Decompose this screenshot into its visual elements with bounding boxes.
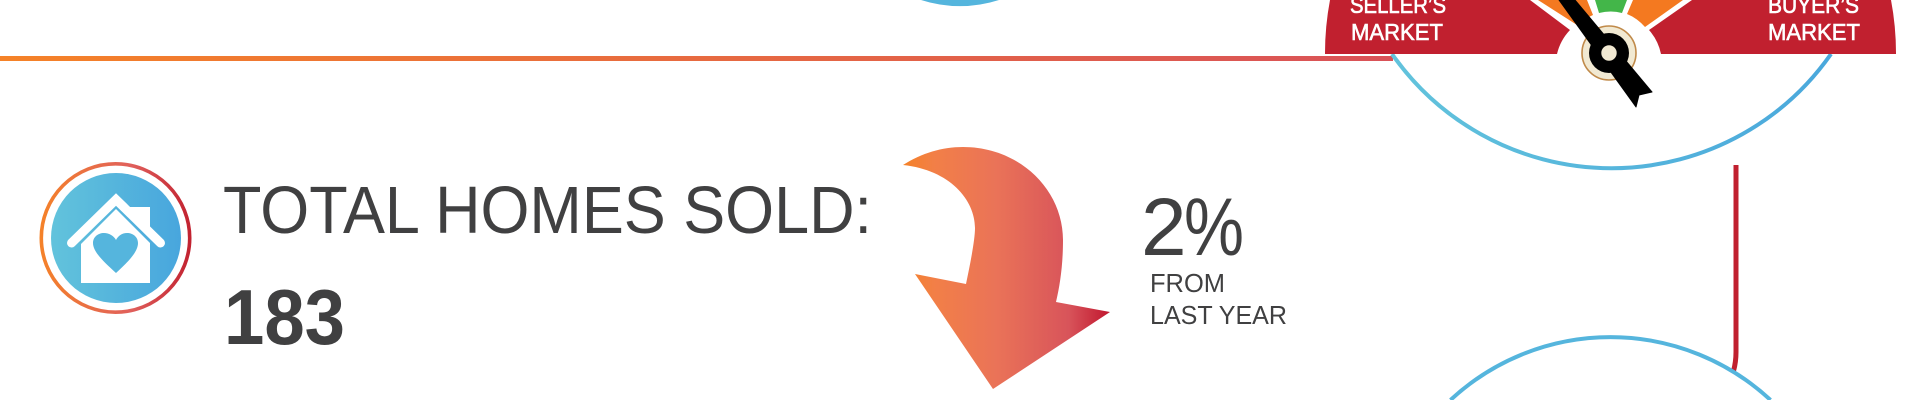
bottom circle outline [1450, 337, 1770, 400]
gauge label: seller's market: MARKET [1351, 19, 1443, 45]
gauge label: buyer's market [1768, 0, 1860, 45]
change value: 2%: % [1184, 182, 1244, 273]
change caption: from last year [1150, 268, 1287, 330]
arrow: downward trend [903, 147, 1110, 389]
gauge green zone [1595, 0, 1627, 13]
gauge outline arc [1392, 54, 1831, 168]
icon: house with heart [41, 164, 190, 312]
change caption: from last year: LAST YEAR [1150, 300, 1287, 330]
change value: 2%: 2 [1141, 182, 1187, 273]
gauge needle [1559, 0, 1652, 107]
value: 183: 183 [224, 273, 345, 361]
red connector line [1734, 165, 1736, 371]
change value: 2% [1141, 182, 1244, 273]
gauge label: buyer's market: MARKET [1768, 19, 1860, 45]
top blue circle fragment [921, 0, 999, 6]
gauge red zones [1325, 0, 1896, 54]
heading: total homes sold: TOTAL HOMES SOLD: [223, 173, 872, 248]
gauge hub ring [1582, 26, 1636, 80]
gauge: market meter [1325, 0, 1896, 168]
gradient divider line [0, 56, 1393, 61]
change caption: from last year: FROM [1150, 268, 1225, 298]
gauge orange zones [1538, 0, 1683, 27]
gauge label: seller's market [1350, 0, 1446, 45]
